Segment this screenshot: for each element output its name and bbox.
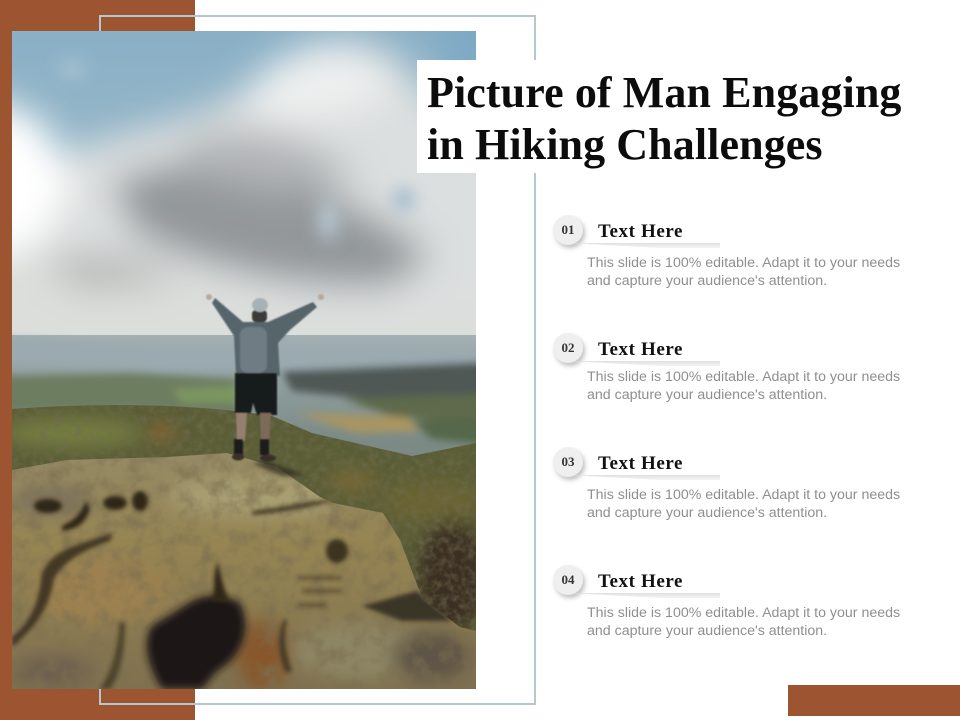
description 03: and capture your audience's attention. bbox=[587, 505, 827, 521]
rock bbox=[12, 451, 476, 692]
number badge 04: 04 bbox=[562, 572, 574, 587]
description 02 bbox=[587, 369, 900, 403]
panel: brown bottom-right bar bbox=[788, 685, 960, 716]
number badge 03: 03 bbox=[562, 454, 574, 469]
description 01: and capture your audience's attention. bbox=[587, 273, 827, 289]
number badge 01: 01 bbox=[562, 222, 574, 237]
description 04 bbox=[587, 605, 900, 639]
panel: title background bbox=[417, 60, 917, 173]
description 02: and capture your audience's attention. bbox=[587, 387, 827, 403]
rock crevices bbox=[147, 595, 245, 689]
heading 02: Text Here bbox=[598, 339, 683, 360]
underline 04 bbox=[570, 593, 720, 598]
panel: thin outline frame bbox=[99, 15, 536, 705]
list item 04 bbox=[552, 565, 900, 639]
heading 04: Text Here bbox=[598, 571, 683, 592]
clouds bbox=[0, 0, 542, 391]
title bbox=[427, 68, 901, 169]
number badge 02: 02 bbox=[562, 340, 574, 355]
description 02: This slide is 100% editable. Adapt it to your needs bbox=[587, 369, 900, 385]
heading 03: Text Here bbox=[598, 453, 683, 474]
number badge 04 bbox=[553, 565, 583, 595]
description 03 bbox=[587, 487, 900, 521]
description 03: This slide is 100% editable. Adapt it to your needs bbox=[587, 487, 900, 503]
description 04: This slide is 100% editable. Adapt it to your needs bbox=[587, 605, 900, 621]
description 04: and capture your audience's attention. bbox=[587, 623, 827, 639]
title: Picture of Man Engaging bbox=[427, 68, 901, 117]
description 01 bbox=[587, 255, 900, 289]
underline 02 bbox=[570, 361, 720, 366]
number badge 02 bbox=[553, 333, 583, 363]
hiker bbox=[206, 294, 324, 476]
heading 01: Text Here bbox=[598, 221, 683, 242]
underline 03 bbox=[570, 475, 720, 480]
underline 01 bbox=[570, 243, 720, 248]
list item 03 bbox=[552, 447, 900, 521]
title: in Hiking Challenges bbox=[427, 120, 823, 169]
panel: brown left block bbox=[0, 0, 195, 720]
distant landscape bbox=[0, 335, 502, 665]
list item 01 bbox=[552, 215, 900, 289]
number badge 01 bbox=[553, 215, 583, 245]
image: hiker on rocky summit bbox=[12, 31, 476, 689]
list item 02 bbox=[552, 333, 900, 403]
hillside vegetation bbox=[12, 405, 476, 631]
description 01: This slide is 100% editable. Adapt it to your needs bbox=[587, 255, 900, 271]
number badge 03 bbox=[553, 447, 583, 477]
